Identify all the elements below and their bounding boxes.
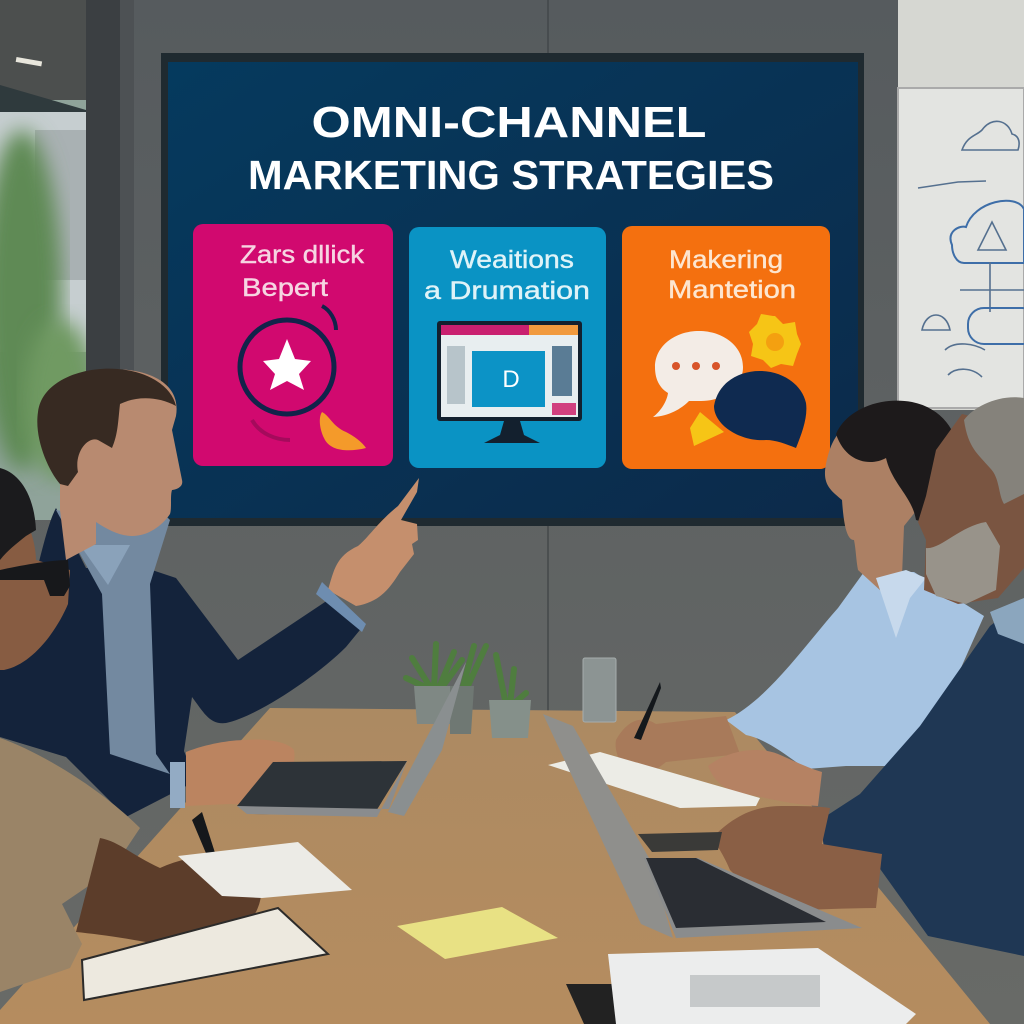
panel: orange card [622, 226, 830, 469]
icon: monitor: D [502, 366, 520, 393]
window frame [86, 0, 134, 540]
panel: blue card [409, 227, 606, 468]
sticky note [397, 907, 558, 959]
wall panel seam [547, 0, 549, 56]
phone [638, 832, 722, 852]
window [0, 0, 96, 520]
laptop: presenter [237, 662, 466, 817]
icon: speech bubbles [653, 314, 806, 448]
laptop: right [543, 714, 862, 938]
panel: blue card: Weaitions [450, 246, 574, 274]
person: older man right [712, 397, 1024, 956]
panel: orange card: Mantetion [668, 276, 796, 304]
display screen [161, 53, 864, 526]
title: OMNI-CHANNEL [312, 98, 706, 147]
table [0, 708, 990, 1024]
presenter hand [328, 478, 419, 606]
whiteboard [898, 0, 1024, 410]
panel: magenta card: Zars dllick [240, 241, 365, 269]
panel: blue card: a Drumation [424, 277, 590, 305]
icon: monitor [437, 321, 582, 443]
panel: magenta card: Bepert [242, 274, 328, 302]
glass [583, 658, 616, 722]
panel: orange card: Makering [669, 246, 783, 274]
title [248, 98, 774, 198]
notebook: left [82, 842, 352, 1000]
person: left presenter [0, 369, 419, 817]
notebook: right [548, 752, 760, 808]
plants [406, 644, 531, 738]
panel: magenta card [193, 224, 393, 466]
person: woman right [616, 401, 984, 806]
person: left foreground [0, 468, 261, 992]
tablet and documents [566, 948, 916, 1024]
title: MARKETING STRATEGIES [248, 152, 774, 198]
